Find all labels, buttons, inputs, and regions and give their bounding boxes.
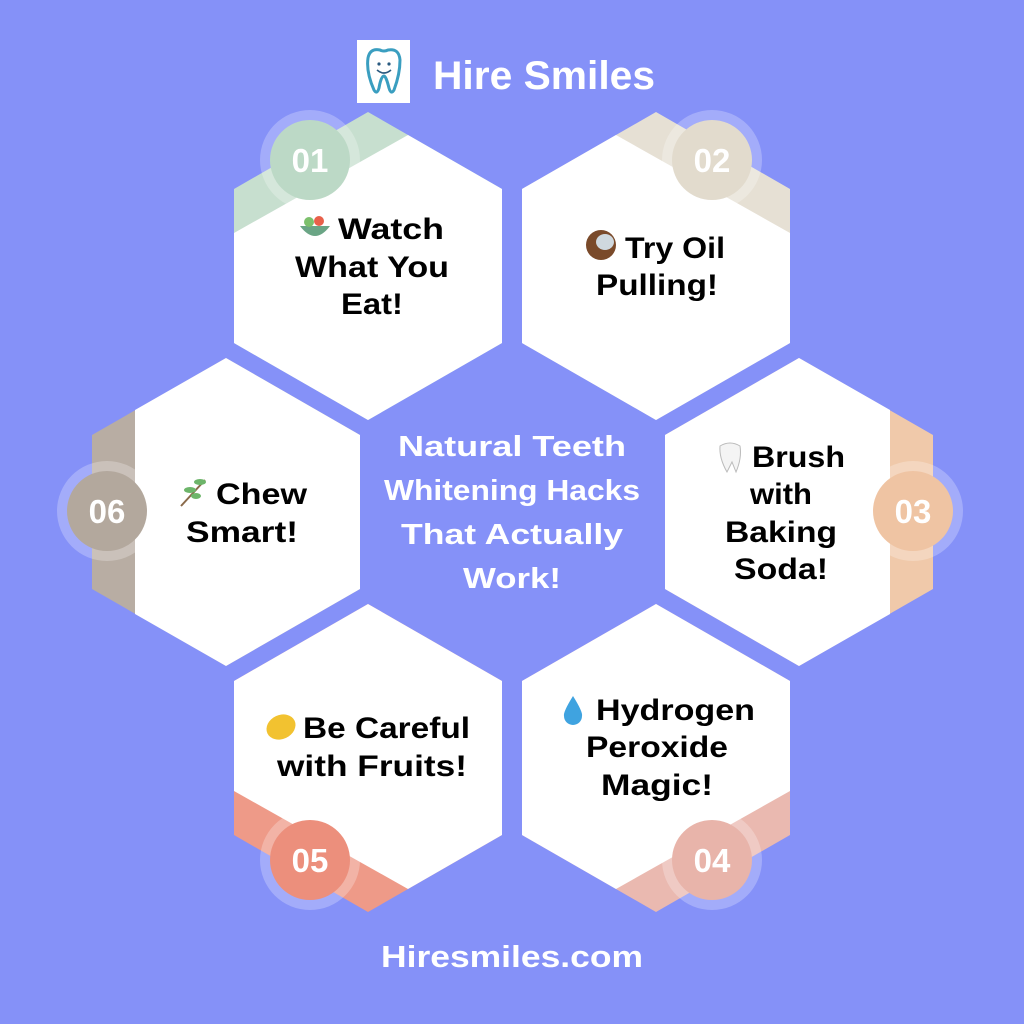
footer url: Hiresmiles.com (381, 939, 643, 974)
text 03: Baking (725, 516, 837, 549)
badge 05 (260, 810, 360, 910)
hexagon 05 (234, 604, 502, 912)
text 05 (276, 712, 470, 783)
badge 03 (863, 461, 963, 561)
center title (384, 431, 640, 595)
text 03: Brush (752, 441, 845, 474)
text 03 (725, 441, 845, 586)
badge 02 (662, 110, 762, 210)
badge 06 (57, 461, 157, 561)
icon: coconut (586, 230, 616, 260)
text 01 (295, 213, 449, 321)
badge 01: 01 (292, 142, 328, 179)
badge 01 (260, 110, 360, 210)
center title: Natural Teeth (398, 431, 626, 463)
text 04: Peroxide (586, 731, 728, 764)
text 05: with Fruits! (276, 750, 467, 783)
icon: herb (181, 479, 206, 506)
hexagon 02 (522, 110, 790, 420)
icon: lemon (262, 710, 300, 744)
badge 02: 02 (694, 142, 730, 179)
hexagon 06 (57, 358, 360, 666)
hexagon 01 (234, 110, 502, 420)
text 05: Be Careful (303, 712, 470, 745)
badge 04 (662, 810, 762, 910)
center title: That Actually (401, 519, 623, 551)
icon: tooth (720, 443, 740, 472)
brand name: Hire Smiles (433, 54, 655, 98)
center title: Whitening Hacks (384, 475, 640, 507)
text 03: with (749, 478, 812, 511)
text 02: Pulling! (596, 269, 718, 302)
text 06: Chew (216, 478, 308, 511)
text 03: Soda! (734, 553, 828, 586)
logo (357, 40, 655, 103)
badge 03: 03 (895, 493, 931, 530)
center title: Work! (463, 563, 561, 595)
text 04 (586, 694, 755, 802)
badge 05: 05 (292, 842, 328, 879)
text 01: What You (295, 251, 449, 284)
text 01: Watch (338, 213, 444, 246)
text 06: Smart! (186, 516, 298, 549)
text 02: Try Oil (625, 232, 725, 265)
text 04: Magic! (601, 769, 713, 802)
text 02 (596, 232, 725, 302)
text 06 (186, 478, 308, 549)
icon: water drop (564, 696, 582, 725)
badge 06: 06 (89, 493, 125, 530)
icon: salad (300, 216, 330, 236)
hexagon 03 (665, 358, 963, 666)
text 04: Hydrogen (596, 694, 755, 727)
hexagon 04 (522, 604, 790, 912)
badge 04: 04 (694, 842, 731, 879)
text 01: Eat! (341, 288, 403, 321)
